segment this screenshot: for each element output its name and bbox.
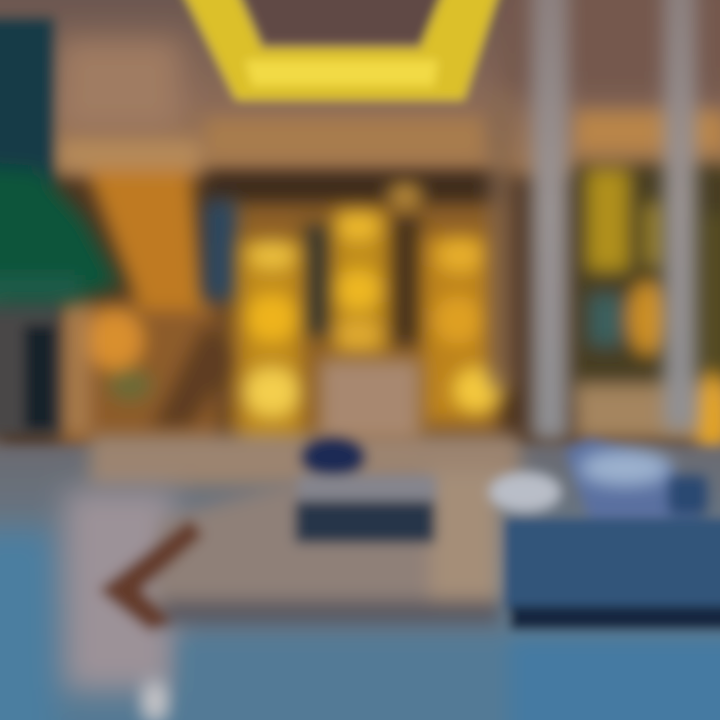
- ceiling light: [172, 0, 506, 100]
- green tree: [0, 165, 120, 305]
- blue sofa: [489, 438, 720, 630]
- sofa: shadow: [510, 606, 720, 630]
- ottoman: dark base: [296, 502, 434, 542]
- sofa: dark cushion right: [668, 475, 708, 515]
- brown chevron table leg: [100, 520, 202, 630]
- lamp glow above centre: [387, 182, 423, 210]
- sofa: body: [504, 518, 720, 610]
- sofa: back cushions: [565, 438, 700, 520]
- left orange wall: [60, 140, 235, 450]
- navy ottoman: [296, 437, 436, 542]
- right window bays: [570, 165, 720, 466]
- floor: [0, 360, 720, 720]
- dark lower left doorway: [0, 300, 60, 435]
- column: right: [424, 235, 502, 420]
- dark columns: [204, 200, 420, 345]
- column: centre: [334, 210, 386, 355]
- vertical poles: [488, 0, 696, 440]
- left dark teal panel: [0, 18, 54, 188]
- ceiling light: bright strip: [245, 60, 438, 86]
- sofa: highlight cushion: [579, 450, 671, 486]
- yellow lit columns: [240, 182, 502, 492]
- column: left: [240, 240, 302, 492]
- ottoman: cushion back: [301, 437, 365, 477]
- ceiling light: yellow hexagon frame: [172, 0, 506, 100]
- rug: [150, 470, 500, 624]
- ceiling background: [0, 0, 720, 200]
- sofa: white cushion left: [489, 472, 561, 512]
- ceiling light: inner recess: [235, 0, 450, 42]
- back wall: [0, 172, 720, 465]
- ottoman: light top: [298, 476, 436, 502]
